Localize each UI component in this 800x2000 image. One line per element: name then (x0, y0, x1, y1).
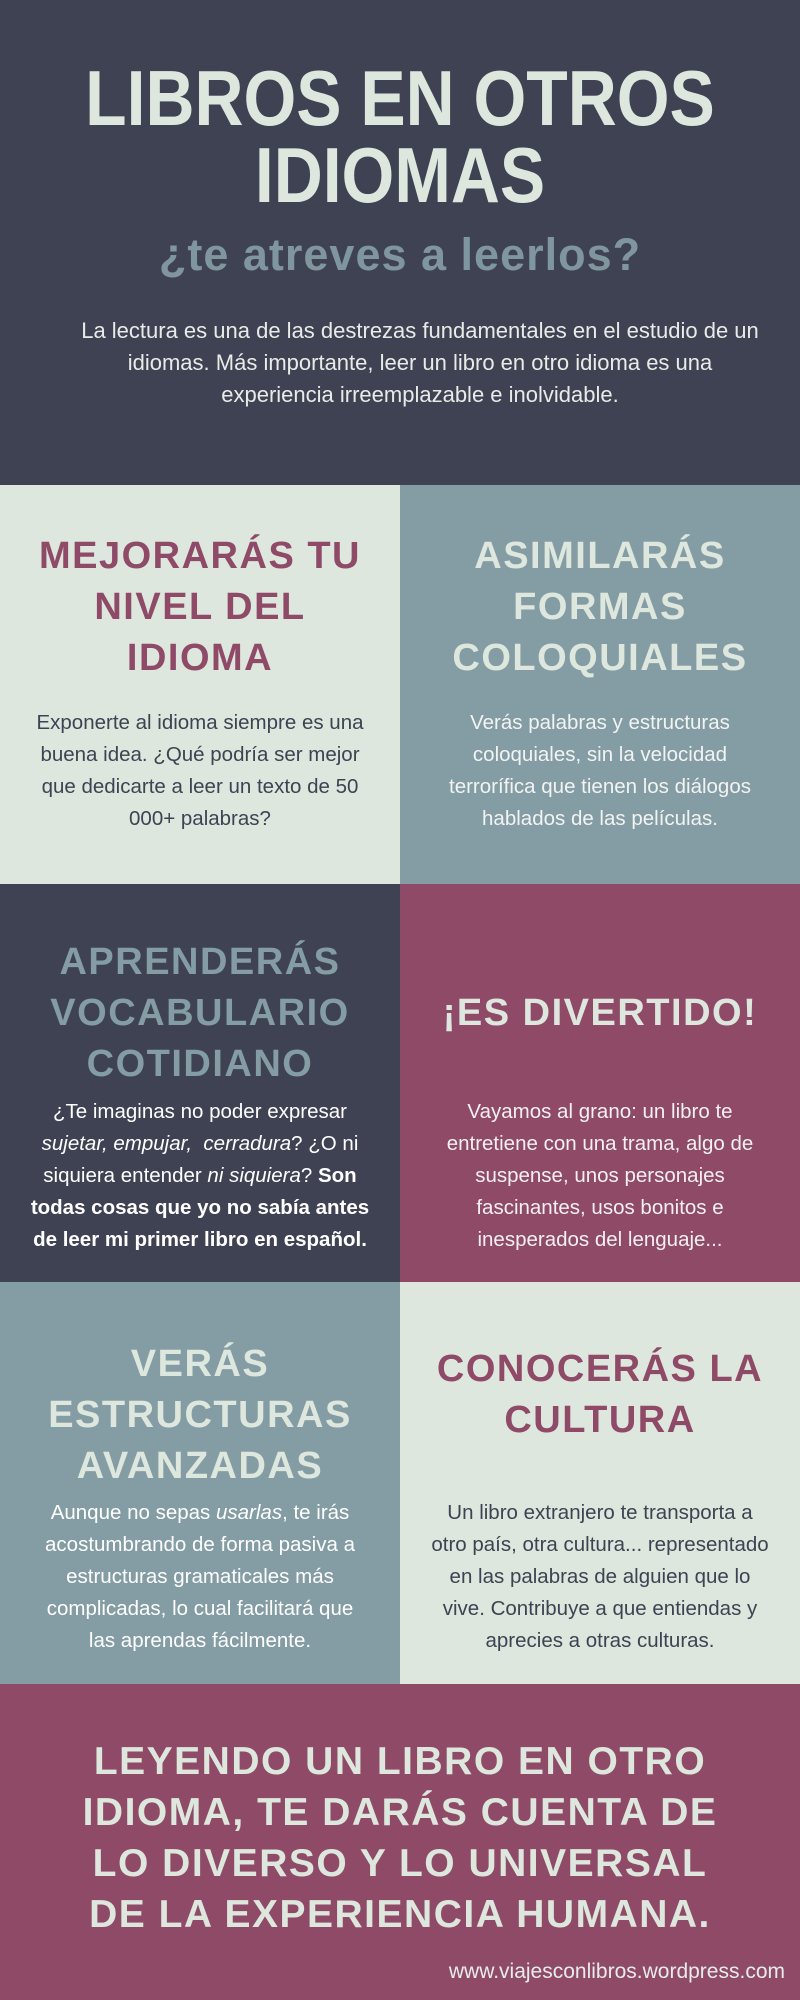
panel: divertido (400, 884, 800, 1282)
text (449, 711, 751, 830)
panel: conocerás (400, 1282, 800, 1684)
panel: mejorarás (0, 485, 400, 884)
heading: MEJORARÁS TU (39, 535, 361, 577)
text (431, 1501, 769, 1652)
heading (452, 534, 748, 679)
text: las aprendas fácilmente. (89, 1629, 311, 1652)
heading: ESTRUCTURAS (48, 1394, 352, 1436)
heading: COTIDIANO (87, 1043, 313, 1085)
text: vive. Contribuye a que entiendas y (443, 1597, 757, 1620)
text: suspense, unos personajes (475, 1164, 725, 1187)
heading: COLOQUIALES (452, 637, 748, 679)
header panel (0, 0, 800, 485)
text: todas cosas que yo no sabía antes (31, 1196, 369, 1219)
text: aprecies a otras culturas. (485, 1629, 715, 1652)
heading (48, 1342, 352, 1487)
title (85, 54, 715, 219)
title: LIBROS EN OTROS (85, 54, 715, 142)
heading: ¡ES DIVERTIDO! (443, 992, 757, 1034)
heading: IDIOMA (127, 637, 273, 679)
subtitle: ¿te atreves a leerlos? (159, 229, 641, 280)
closing statement: DE LA EXPERIENCIA HUMANA. (89, 1893, 711, 1936)
text: buena idea. ¿Qué podría ser mejor (40, 743, 360, 766)
panel: verás (0, 1282, 400, 1684)
heading: FORMAS (513, 586, 687, 628)
text: sujetar, empujar, cerradura? ¿O ni (42, 1132, 358, 1155)
heading: CULTURA (504, 1399, 696, 1441)
text: estructuras gramaticales más (66, 1565, 334, 1588)
closing statement: IDIOMA, TE DARÁS CUENTA DE (83, 1791, 717, 1834)
text: fascinantes, usos bonitos e (476, 1196, 724, 1219)
heading: CONOCERÁS LA (437, 1348, 763, 1390)
text: en las palabras de alguien que lo (450, 1565, 750, 1588)
closing statement: LEYENDO UN LIBRO EN OTRO (94, 1740, 706, 1783)
text: Vayamos al grano: un libro te (467, 1100, 733, 1123)
title: IDIOMAS (255, 131, 545, 219)
text: terrorífica que tienen los diálogos (449, 775, 751, 798)
text: Exponerte al idioma siempre es una (36, 711, 364, 734)
panel: aprenderás (0, 884, 400, 1282)
text: complicadas, lo cual facilitará que (47, 1597, 353, 1620)
text: Verás palabras y estructuras (470, 711, 730, 734)
text (36, 711, 364, 830)
text: hablados de las películas. (482, 807, 718, 830)
website url: www.viajesconlibros.wordpress.com (449, 1960, 785, 1983)
text: Un libro extranjero te transporta a (447, 1501, 753, 1524)
heading: VOCABULARIO (50, 992, 350, 1034)
text (45, 1501, 356, 1652)
closing statement (83, 1740, 717, 1936)
text: 000+ palabras? (129, 807, 271, 830)
intro text: idiomas. Más importante, leer un libro en otro idioma es una (128, 350, 712, 375)
text: que dedicarte a leer un texto de 50 (42, 775, 358, 798)
text: ¿Te imaginas no poder expresar (53, 1100, 347, 1123)
text: acostumbrando de forma pasiva a (45, 1533, 355, 1556)
text: siquiera entender ni siquiera? Son (43, 1164, 357, 1187)
footer panel (0, 1684, 800, 2000)
closing statement: LO DIVERSO Y LO UNIVERSAL (93, 1842, 707, 1885)
intro text: experiencia irreemplazable e inolvidable. (221, 382, 619, 407)
text: coloquiales, sin la velocidad (473, 743, 727, 766)
text (31, 1100, 369, 1251)
heading (437, 1347, 763, 1441)
text: inesperados del lenguaje... (477, 1228, 723, 1251)
heading: APRENDERÁS (59, 941, 341, 983)
text: de leer mi primer libro en español. (33, 1228, 367, 1251)
heading (50, 940, 350, 1085)
heading: NIVEL DEL (94, 586, 306, 628)
panel: asimilarás (400, 485, 800, 884)
heading: ASIMILARÁS (474, 535, 726, 577)
text: otro país, otra cultura... representado (431, 1533, 769, 1556)
intro text: La lectura es una de las destrezas fundamentales en el estudio de un (81, 318, 759, 343)
text (447, 1100, 753, 1251)
heading: VERÁS (131, 1343, 269, 1385)
text: entretiene con una trama, algo de (447, 1132, 753, 1155)
heading: AVANZADAS (77, 1445, 323, 1487)
intro text (81, 318, 759, 407)
heading (39, 534, 361, 679)
text: Aunque no sepas usarlas, te irás (51, 1501, 349, 1524)
